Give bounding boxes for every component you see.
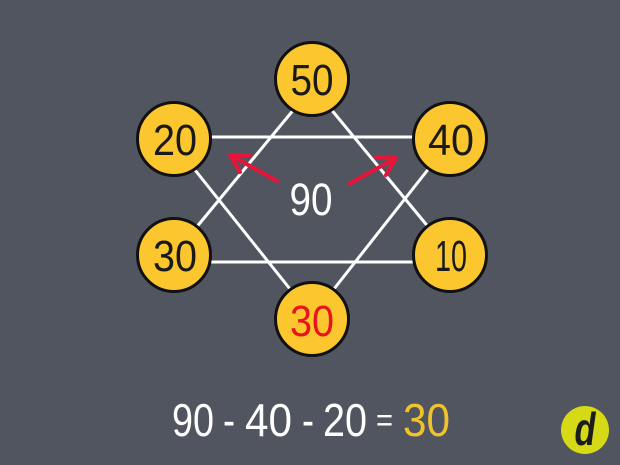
node: 50 [276, 42, 348, 116]
equation: 20 [323, 394, 367, 446]
equation: = [376, 402, 393, 438]
equation: 30 [403, 394, 450, 446]
node: 40 [414, 102, 486, 176]
arrow: left red [230, 155, 277, 181]
node: 30 left: 30 [153, 232, 197, 281]
node: 50: 50 [290, 56, 334, 105]
equation: 40 [245, 394, 292, 446]
equation: - [302, 394, 314, 446]
node: 30 bottom, red answer [276, 282, 348, 356]
centre number 90: 90 [290, 174, 332, 225]
node: 20: 20 [153, 116, 197, 165]
node: 30 left [138, 218, 210, 292]
logo: d badge [561, 403, 609, 455]
equation [172, 394, 450, 446]
equation: - [223, 394, 235, 446]
equation: 90 [172, 394, 214, 446]
node: 40: 40 [428, 116, 474, 165]
node: 30 bottom, red answer: 30 [290, 297, 334, 346]
logo: d badge: d [574, 403, 596, 455]
arrow: right red [349, 157, 396, 184]
node: 20 [138, 102, 210, 176]
node: 10: 10 [435, 232, 467, 281]
node: 10 [414, 218, 486, 292]
